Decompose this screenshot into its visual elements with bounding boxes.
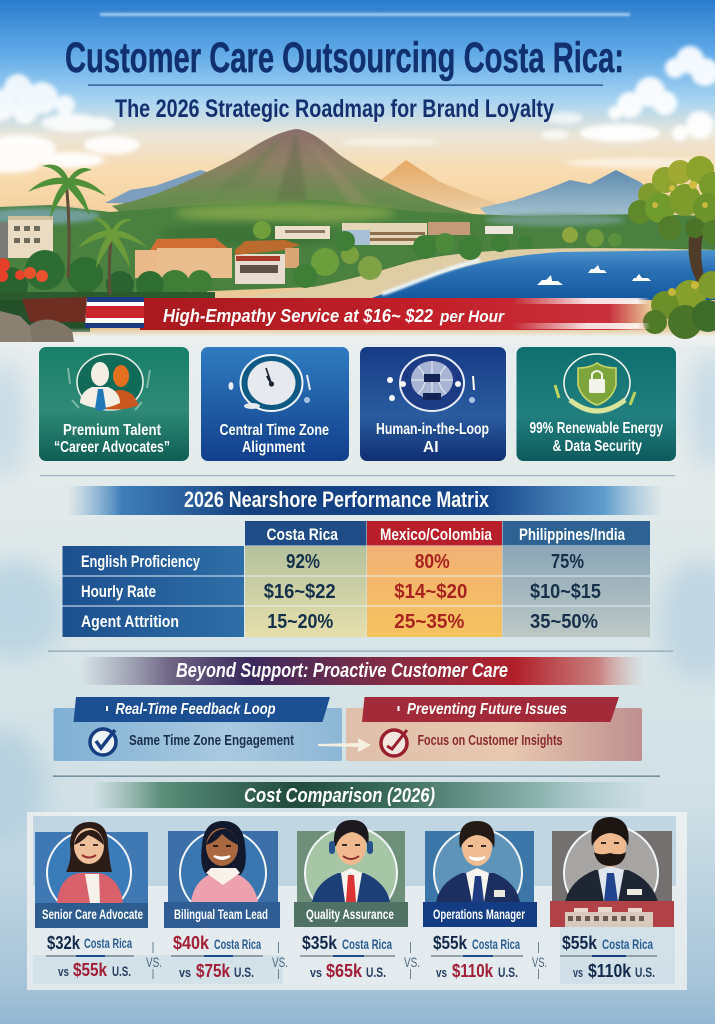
Costa Rica values: $16~$22: [264, 581, 336, 603]
table header row: Costa Rica: [266, 525, 338, 544]
body text: Focus on Customer Insights: [418, 732, 562, 749]
subtitle: The 2026 Strategic Roadmap for Brand Loyalty: [115, 95, 554, 123]
row labels: English Proficiency: [81, 553, 201, 571]
icon: people: [68, 354, 150, 411]
body text: Same Time Zone Engagement: [129, 732, 294, 749]
role: quality assurance: [294, 820, 408, 927]
card label: Premium Talent: [63, 422, 161, 439]
Costa Rica values: [264, 551, 336, 633]
portrait: [304, 820, 398, 902]
town buildings: [0, 216, 513, 284]
salary: executive: vs: [573, 965, 583, 980]
Costa Rica values: 92%: [286, 551, 320, 573]
salary: operations manager: $110k: [452, 961, 494, 981]
table body background: [62, 546, 650, 637]
salary: senior care advocate: [46, 933, 134, 980]
table header row: [245, 521, 650, 546]
card: premium talent: [39, 347, 189, 461]
Mexico and Colombia values: $14~$20: [394, 581, 467, 603]
salary: senior care advocate: U.S.: [112, 963, 131, 979]
beach and sea: [215, 248, 715, 300]
portrait: [563, 817, 659, 901]
salary: operations manager: $55k: [433, 933, 468, 953]
icon: insight badge: [381, 730, 407, 756]
banner: cost comparison heading: [93, 782, 652, 808]
icon: clock: [228, 355, 310, 411]
icon: shield: [555, 354, 635, 412]
role: operations manager: Operations Manager: [433, 907, 526, 922]
card label: & Data Security: [552, 438, 642, 455]
icon: globe: [387, 355, 475, 411]
row labels: [81, 553, 201, 631]
volcano: [112, 129, 482, 240]
salary: bilingual team lead: Costa Rica: [214, 936, 261, 952]
card label: Human-in-the-Loop: [376, 421, 489, 438]
salary: quality assurance: Costa Rica: [342, 936, 392, 952]
Costa Rica values: 15~20%: [267, 611, 333, 633]
card label: [54, 422, 170, 456]
ribbon text: High-Empathy Service at $16~ $22: [163, 305, 434, 326]
title underline: [88, 84, 603, 86]
salary: executive: $110k: [588, 961, 632, 981]
Mexico and Colombia values: 25~35%: [394, 611, 464, 633]
card label: Alignment: [242, 439, 305, 456]
Mexico and Colombia values: 80%: [415, 551, 450, 573]
row labels: Hourly Rate: [81, 583, 156, 601]
portrait: [46, 822, 132, 903]
salary: operations manager: vs: [436, 965, 447, 980]
card label: [530, 420, 663, 455]
salary: senior care advocate: Costa Rica: [84, 935, 132, 951]
card: renewable energy and security: [516, 347, 676, 461]
salary: operations manager: U.S.: [498, 964, 518, 980]
tab heading: [74, 697, 330, 722]
card label: 99% Renewable Energy: [530, 420, 663, 437]
salary: operations manager: [431, 933, 523, 981]
flowers and rocks: [0, 258, 88, 342]
salary: quality assurance: $65k: [326, 961, 363, 981]
salary: senior care advocate: vs: [58, 964, 69, 979]
tab heading: Real-Time Feedback Loop: [116, 701, 276, 718]
salary: senior care advocate: $55k: [73, 960, 108, 980]
row labels: Agent Attrition: [81, 613, 179, 631]
card label: [220, 422, 329, 456]
salary: quality assurance: U.S.: [366, 964, 386, 980]
role: bilingual team lead: [164, 821, 280, 928]
palm trees: [28, 164, 148, 295]
banner: matrix heading: 2026 Nearshore Performance Matrix: [184, 487, 490, 512]
Philippines and India values: 35~50%: [530, 611, 598, 633]
banner: matrix heading: [68, 486, 664, 515]
banner: proactive care heading: Beyond Support: Proactive Customer Care: [176, 660, 508, 682]
role: bilingual team lead: Bilingual Team Lead: [174, 907, 268, 922]
Philippines and India values: 75%: [551, 551, 584, 573]
role: operations manager: [423, 821, 537, 927]
role: quality assurance: Quality Assurance: [306, 907, 394, 922]
separator: vs: [272, 942, 288, 979]
trees and shrubs: [0, 221, 622, 332]
banner: proactive care heading: [80, 657, 644, 685]
tab heading: Preventing Future Issues: [407, 701, 567, 718]
salary: quality assurance: [300, 933, 395, 981]
table header row: Philippines/India: [519, 525, 625, 544]
salary: executive: U.S.: [635, 964, 655, 980]
lower fade: [0, 328, 715, 346]
card label: AI: [423, 439, 438, 456]
card label: “Career Advocates”: [54, 439, 170, 456]
salary: quality assurance: vs: [310, 965, 322, 980]
salary: executive: Costa Rica: [602, 936, 653, 952]
card: time zone: [201, 347, 349, 461]
separator: vs: VS.: [272, 954, 288, 970]
icon: building: [565, 907, 653, 927]
salary: operations manager: Costa Rica: [472, 936, 520, 952]
banner: cost comparison heading: Cost Comparison (2026): [244, 785, 435, 807]
hero landscape illustration: [0, 0, 715, 346]
role: senior care advocate: Senior Care Advocate: [42, 907, 143, 922]
separator: vs: VS.: [532, 954, 547, 970]
panel: preventing future issues: [346, 697, 642, 761]
separator: vs: VS.: [146, 954, 162, 970]
Philippines and India values: [530, 551, 601, 633]
icon: check badge: [90, 729, 116, 755]
right foreground tree: [628, 156, 715, 339]
salary: bilingual team lead: $40k: [173, 933, 210, 953]
lower background: [0, 335, 715, 1024]
salary: bilingual team lead: vs: [179, 965, 191, 980]
icon: Costa Rica flag: [85, 297, 144, 328]
Mexico and Colombia values: [394, 551, 467, 633]
panel: feature cards: [39, 347, 676, 461]
ribbon text: per Hour: [439, 308, 505, 326]
role: senior care advocate: [35, 822, 148, 928]
salary: quality assurance: $35k: [302, 933, 338, 953]
tab heading: [362, 697, 619, 722]
portrait: [179, 821, 267, 902]
table header row: Mexico/Colombia: [380, 525, 492, 544]
card: human-in-the-loop AI: [360, 347, 506, 461]
panel: real-time feedback loop: [54, 697, 342, 761]
table: nearshore performance matrix: [62, 521, 650, 637]
Philippines and India values: $10~$15: [530, 581, 601, 603]
salary: executive: [560, 933, 657, 981]
panel: cost comparison: [27, 812, 687, 990]
separator: vs: [404, 942, 420, 979]
salary: bilingual team lead: [171, 933, 263, 981]
card label: Central Time Zone: [220, 422, 329, 439]
card label: [376, 421, 489, 456]
separator: vs: VS.: [404, 954, 420, 970]
arrow: [318, 738, 371, 752]
distant mountains: [105, 160, 665, 218]
role: executive with building: [550, 817, 674, 927]
separator: vs: [146, 942, 162, 979]
portrait: [433, 821, 523, 902]
clouds: [0, 46, 715, 173]
price ribbon: [140, 298, 650, 330]
salary: executive: $55k: [562, 933, 598, 953]
salary: bilingual team lead: U.S.: [234, 964, 254, 980]
salary: senior care advocate: $32k: [47, 933, 81, 953]
salary: bilingual team lead: $75k: [196, 961, 231, 981]
forest band: [0, 200, 715, 300]
separator: vs: [532, 942, 547, 979]
